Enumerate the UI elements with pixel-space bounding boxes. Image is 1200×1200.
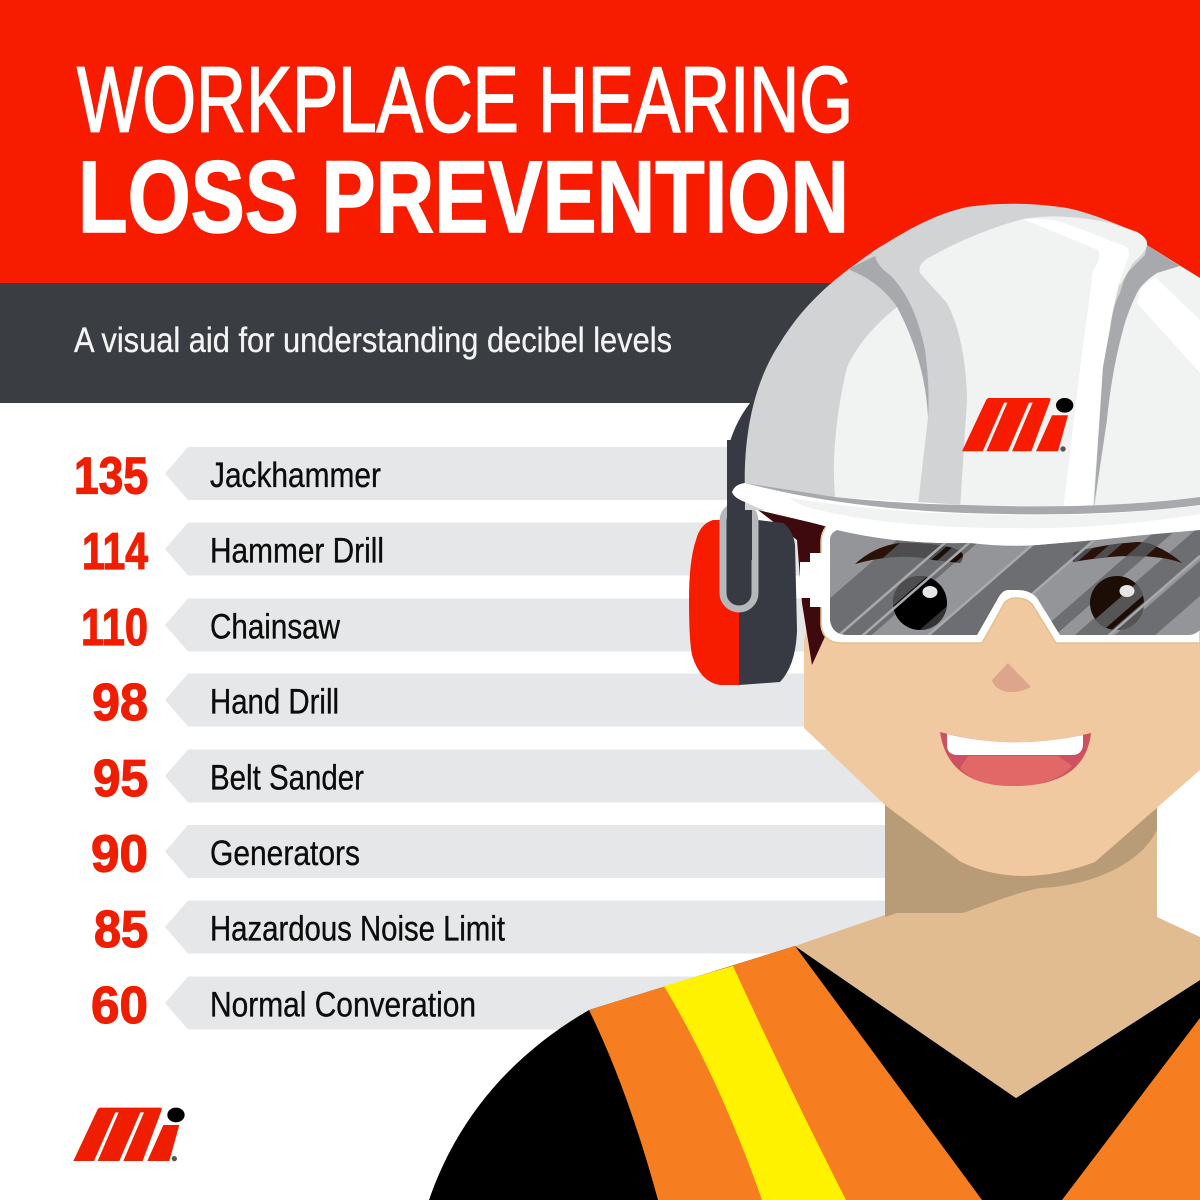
neck and shoulders (795, 800, 1200, 1098)
row: 90 Generators (91, 825, 900, 884)
goggles lens (830, 527, 1200, 635)
neck shadow (885, 800, 1157, 917)
row: 85 Hazardous Noise Limit: Hazardous Noise Limit (210, 910, 505, 948)
row: 85 Hazardous Noise Limit: 85 (94, 901, 148, 959)
logo: hat (962, 398, 1073, 452)
row: 90 Generators: Generators (210, 834, 360, 873)
ear muff dark side (739, 520, 797, 685)
mouth (940, 732, 1091, 786)
hard hat (732, 204, 1200, 545)
hat right highlight (1137, 277, 1200, 373)
row: 135 Jackhammer: Jackhammer (210, 456, 381, 495)
row: 85 Hazardous Noise Limit (94, 900, 900, 959)
row: 60 Normal Converation: Normal Converation (210, 986, 476, 1024)
goggles (800, 526, 1200, 644)
ear muff red side (689, 520, 739, 685)
eyebrow right (1072, 542, 1182, 563)
worker illustration (429, 204, 1200, 1200)
row: 110 Chainsaw (81, 598, 900, 657)
decibel list (74, 447, 900, 1035)
headband (727, 403, 755, 520)
row: 114 Hammer Drill: Hammer Drill (210, 532, 384, 570)
goggles frame (821, 520, 1200, 643)
lens thin reflections (839, 540, 1200, 635)
hat left panel (834, 307, 928, 505)
subtitle band (0, 283, 1200, 403)
header: red title band (0, 0, 1200, 283)
title line two: LOSS PREVENTION (78, 140, 849, 254)
row: 114 Hammer Drill: 114 (82, 523, 148, 581)
title line one: WORKPLACE HEARING (77, 48, 853, 152)
vest: right orange strap (1062, 1018, 1200, 1200)
shirt (429, 946, 1200, 1200)
row: 95 Belt Sander: 95 (93, 750, 148, 808)
row: 135 Jackhammer (74, 447, 900, 506)
hair (758, 510, 830, 665)
headband strap (727, 440, 752, 560)
hat right panel (1094, 266, 1200, 510)
hat dome (745, 204, 1200, 510)
row: 114 Hammer Drill (82, 522, 900, 581)
eye highlight left (922, 586, 938, 598)
hat brim shadow (745, 483, 1200, 514)
nose (992, 663, 1031, 692)
eye highlight right (1120, 585, 1134, 597)
logo: footer (73, 1108, 185, 1161)
row: 98 Hand Drill: Hand Drill (210, 682, 339, 722)
eye left (893, 576, 947, 630)
hat center panel (919, 219, 1099, 510)
row: 110 Chainsaw: 110 (81, 599, 148, 657)
face (804, 535, 1200, 876)
hat brim (732, 483, 1200, 545)
hat brim inner band (790, 498, 1200, 528)
ear muff (689, 440, 797, 685)
hat left dark seam (850, 256, 929, 420)
hat top right light ridge (1023, 216, 1147, 285)
row: 135 Jackhammer: 135 (74, 448, 148, 506)
hat white stripe (1023, 219, 1129, 510)
row: 95 Belt Sander (93, 750, 900, 808)
eye right (1090, 576, 1144, 630)
row: 98 Hand Drill: 98 (92, 674, 148, 732)
row: 110 Chainsaw: Chainsaw (210, 608, 341, 646)
eyebrow left (855, 542, 963, 564)
row: 90 Generators: 90 (91, 826, 148, 884)
hat right dark seam (1094, 245, 1180, 505)
vest: left orange strap (589, 946, 982, 1200)
row: 60 Normal Converation (91, 976, 760, 1035)
row: 98 Hand Drill (92, 674, 900, 732)
goggles side connector (800, 553, 828, 607)
row: 60 Normal Converation: 60 (91, 977, 148, 1035)
row: 95 Belt Sander: Belt Sander (210, 758, 364, 798)
lens dark bands (830, 530, 1200, 635)
ear muff clip (723, 505, 755, 609)
vest: yellow stripe (664, 966, 846, 1200)
subtitle text: A visual aid for understanding decibel levels (74, 321, 672, 360)
